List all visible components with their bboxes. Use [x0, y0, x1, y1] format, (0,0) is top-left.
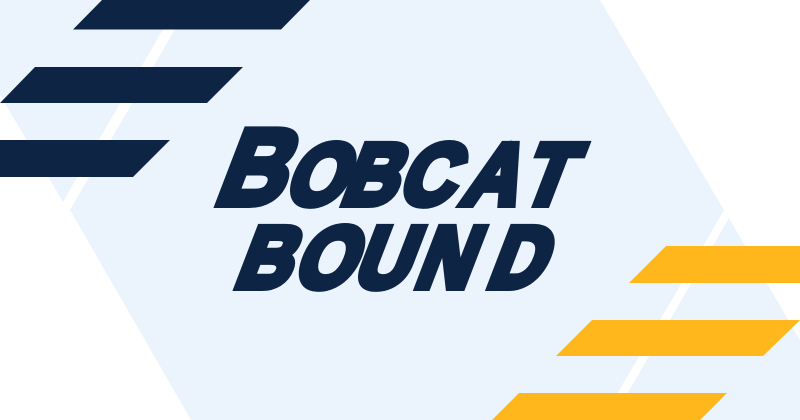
panel: right pale hexagon fragment — [612, 218, 800, 420]
navy stripes top left — [0, 0, 310, 177]
stripe: navy bottom — [0, 140, 170, 177]
yellow stripes bottom right — [492, 246, 800, 420]
panel: left pale hexagon fragment — [0, 0, 180, 202]
stripe: navy middle — [0, 67, 243, 103]
stripe: navy top — [73, 0, 310, 30]
title line 1: B — [203, 108, 317, 227]
title line 2: BOUND — [225, 209, 569, 305]
title line 1: OBCAT — [275, 126, 594, 222]
title — [203, 108, 601, 305]
stripe: yellow middle — [556, 320, 800, 356]
stripe: yellow bottom — [492, 393, 727, 420]
stripe: yellow top — [629, 246, 800, 283]
